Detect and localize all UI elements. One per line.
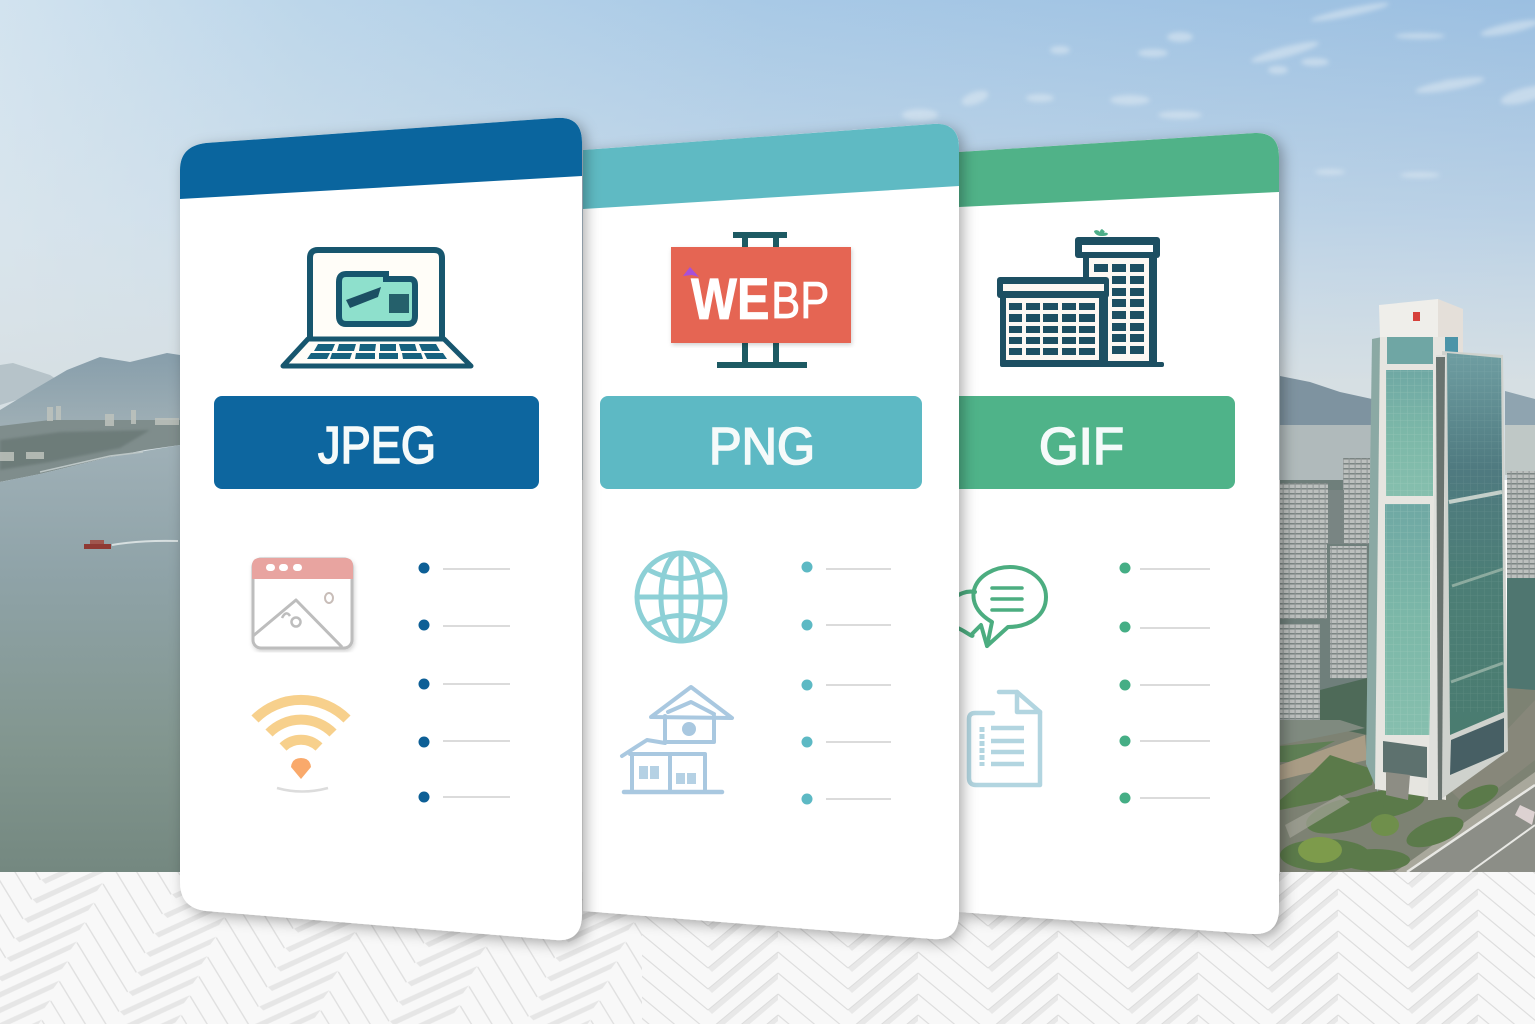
panel: PNG card xyxy=(583,124,959,939)
icon: speech bubbles xyxy=(950,567,1046,646)
background: river and hills on the left xyxy=(0,353,180,872)
background: city and tower on the right xyxy=(1280,299,1535,872)
bullet list xyxy=(418,562,510,802)
GIF label button xyxy=(940,396,1235,489)
bullet list xyxy=(1120,562,1210,804)
icon: office buildings xyxy=(997,229,1164,367)
panel: GIF card xyxy=(940,133,1279,934)
panel: JPEG card xyxy=(180,118,582,940)
PNG label button xyxy=(600,396,922,489)
residential blocks xyxy=(1280,458,1535,720)
icon: globe xyxy=(637,553,725,641)
icon: WEBP sign on easel xyxy=(671,232,851,368)
background: sky xyxy=(0,0,1535,480)
JPEG label button xyxy=(214,396,539,489)
icon: wifi signal xyxy=(255,700,347,792)
ground and trees xyxy=(1280,678,1535,872)
GIF label button: GIF xyxy=(1039,418,1124,476)
background: herringbone floor pattern xyxy=(0,872,1535,1024)
JPEG card header band xyxy=(180,118,582,199)
icon: browser window with image xyxy=(252,558,353,648)
PNG label button: PNG xyxy=(709,418,815,476)
icon: document xyxy=(969,692,1040,785)
glass tower xyxy=(1366,299,1508,800)
GIF card header band xyxy=(959,133,1279,207)
PNG card header band xyxy=(583,124,959,209)
boat xyxy=(84,540,111,549)
icon: house xyxy=(622,687,732,792)
icon: laptop with image folder xyxy=(283,250,471,366)
icon: WEBP sign on easel: BP xyxy=(771,273,829,330)
icon: WEBP sign on easel: WE xyxy=(691,268,769,332)
JPEG label button: JPEG xyxy=(318,417,436,475)
bullet list xyxy=(802,562,891,804)
